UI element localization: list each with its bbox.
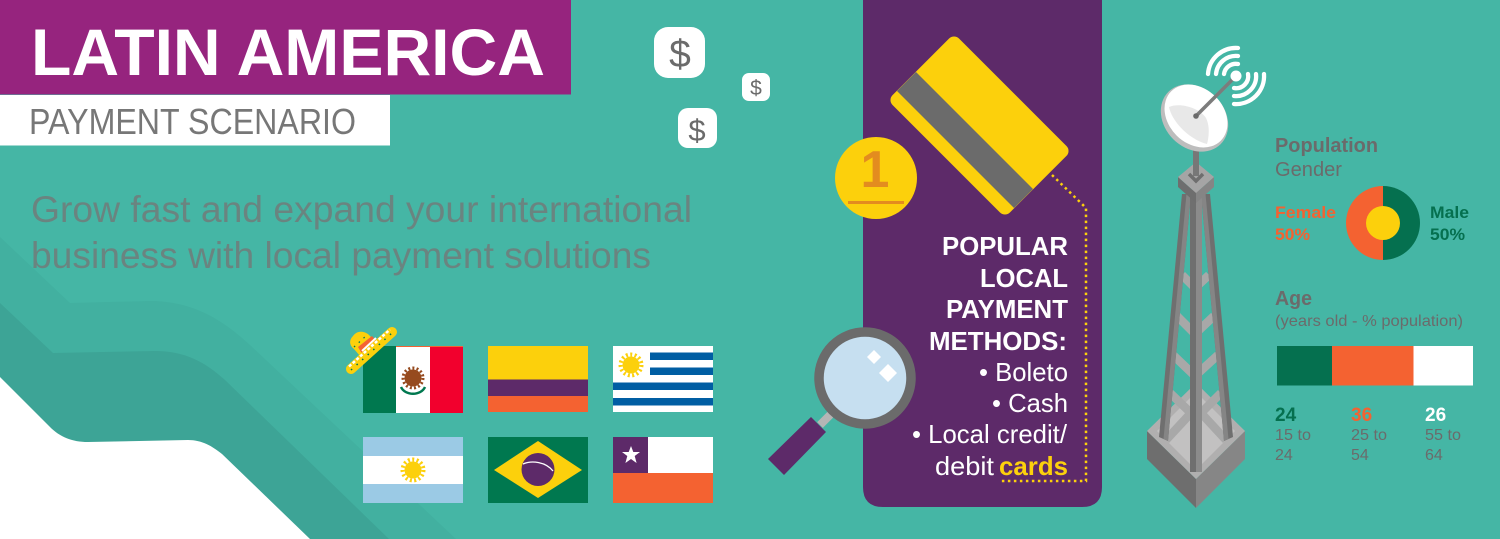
panel text: LOCAL xyxy=(980,263,1068,293)
panel text: POPULAR xyxy=(942,231,1068,261)
icon: credit card xyxy=(888,34,1071,217)
icon: magnifying glass xyxy=(768,332,911,475)
label: male share: 50% xyxy=(1430,225,1465,244)
tagline text: business with local payment solutions xyxy=(31,235,651,276)
panel text: • Cash xyxy=(992,388,1068,418)
age group 25 to 54: 25 to xyxy=(1351,427,1387,444)
panel text: cards xyxy=(999,451,1068,481)
label: male share xyxy=(1430,203,1469,244)
tower cross braces xyxy=(1166,275,1226,440)
age group 55 to 64 xyxy=(1425,405,1461,464)
tower base xyxy=(1147,383,1245,508)
label: female share: Female xyxy=(1275,203,1336,222)
heading: population gender: Population xyxy=(1275,135,1378,157)
title banner: LATIN AMERICA xyxy=(31,15,545,89)
panel text xyxy=(912,231,1068,481)
chart: age stacked bar xyxy=(1277,346,1473,386)
flag: Argentina xyxy=(363,437,463,503)
age group 15 to 24: 24 xyxy=(1275,447,1293,464)
age group 15 to 24: 24 xyxy=(1275,405,1297,426)
icon: dollar tags: $ xyxy=(750,77,762,100)
dotted connector xyxy=(1000,175,1086,481)
icon: sombrero xyxy=(349,330,392,370)
tagline text: Grow fast and expand your international xyxy=(31,189,692,230)
icon: dollar tags xyxy=(654,27,770,148)
tower legs xyxy=(1159,190,1233,472)
flag: Chile xyxy=(613,437,713,503)
icon: dollar tags: $ xyxy=(669,33,691,76)
age group 55 to 64: 26 xyxy=(1425,405,1446,426)
heading: age: (years old - % population) xyxy=(1275,313,1463,330)
background wave bands xyxy=(0,237,456,539)
icon: number one coin xyxy=(835,137,917,219)
label: male share: Male xyxy=(1430,203,1469,222)
panel text: PAYMENT xyxy=(946,294,1068,324)
age group 15 to 24 xyxy=(1275,405,1311,464)
age group 55 to 64: 64 xyxy=(1425,447,1443,464)
panel: popular payment methods xyxy=(863,0,1102,507)
icon: antenna tower xyxy=(1147,48,1264,508)
flag: Colombia xyxy=(488,346,588,412)
age group 15 to 24: 15 to xyxy=(1275,427,1311,444)
label: female share xyxy=(1275,203,1336,244)
panel text: • Boleto xyxy=(979,357,1068,387)
satellite dish xyxy=(1147,71,1242,165)
dish mast xyxy=(1193,146,1199,176)
tagline text xyxy=(31,189,692,276)
flag: Mexico xyxy=(363,346,463,413)
heading: population gender xyxy=(1275,135,1378,181)
subtitle banner: PAYMENT SCENARIO xyxy=(29,101,356,142)
age group 25 to 54 xyxy=(1351,405,1387,464)
icon: number one coin: 1 xyxy=(861,141,889,199)
age group 25 to 54: 36 xyxy=(1351,405,1372,426)
heading: age xyxy=(1275,288,1463,330)
flag: Brazil xyxy=(488,437,588,503)
icon: dollar tags: $ xyxy=(688,113,706,148)
heading: population gender: Gender xyxy=(1275,159,1342,181)
label: female share: 50% xyxy=(1275,225,1310,244)
flag: Uruguay xyxy=(613,346,713,412)
tower platform xyxy=(1178,162,1214,203)
age group 55 to 64: 55 to xyxy=(1425,427,1461,444)
signal waves xyxy=(1208,48,1264,104)
age group 25 to 54: 54 xyxy=(1351,447,1369,464)
panel text: METHODS: xyxy=(929,326,1067,356)
heading: age: Age xyxy=(1275,288,1312,310)
panel text: • Local credit/ xyxy=(912,419,1068,449)
panel text: debit xyxy=(935,451,995,481)
chart: gender donut xyxy=(1346,186,1420,260)
